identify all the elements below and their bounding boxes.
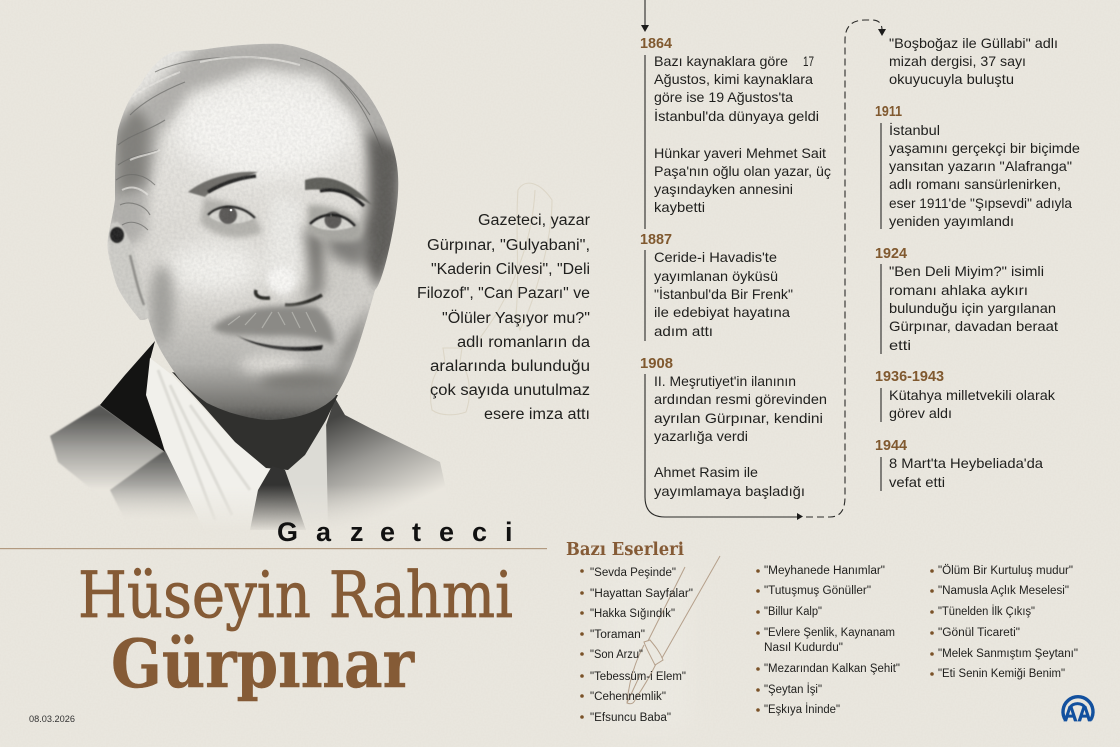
timeline column 1: [640, 36, 831, 499]
timeline column 2: [875, 35, 1080, 490]
works list column 3: "Ölüm Bir Kurtuluş mudur": [938, 565, 1073, 577]
entry 1908: Ahmet Rasim ile: [654, 464, 758, 480]
works list column 2: "Evlere Şenlik, Kaynanam: [764, 627, 895, 639]
nose: [266, 200, 304, 298]
works list column 3: [930, 565, 1078, 680]
intro paragraph: esere imza attı: [484, 406, 590, 423]
chin shading: [260, 373, 340, 391]
subtitle: Gazeteci: t: [412, 517, 421, 547]
entry 1887: [654, 249, 793, 339]
entry 1908: [654, 373, 827, 499]
year 1924: 1924: [875, 246, 907, 262]
intro paragraph: çok sayıda unutulmaz: [430, 382, 590, 399]
entry 1908: yazarlığa verdi: [654, 428, 748, 444]
hair: [102, 36, 405, 250]
intro paragraph: Gürpınar, "Gulyabani",: [427, 237, 590, 254]
title: last name: Gürpınar: [111, 625, 415, 703]
forehead highlight: [175, 82, 355, 178]
intro paragraph: Gazeteci, yazar: [478, 212, 590, 229]
works heading: Bazı Eserleri: [566, 540, 684, 560]
entry 1911: yaşamını gerçekçi bir biçimde: [889, 140, 1080, 156]
entry 1864: İstanbul'da dünyaya geldi: [654, 107, 819, 124]
subtitle: Gazeteci: e: [439, 517, 454, 547]
works list column 2: "Meyhanede Hanımlar": [764, 565, 885, 577]
works list column 3: "Namusla Açlık Meselesi": [938, 585, 1069, 597]
entry 1944: vefat etti: [889, 474, 945, 490]
entry magazine: "Boşboğaz ile Güllabi" adlı: [889, 35, 1058, 51]
entry 1924: "Ben Deli Miyim?" isimli: [889, 263, 1044, 279]
entry 1864: Ağustos, kimi kaynaklara: [654, 71, 813, 87]
entry 1944: 8 Mart'ta Heybeliada'da: [889, 455, 1043, 471]
works list column 2: Nasıl Kudurdu": [764, 642, 843, 654]
jacket and shirt: [50, 341, 455, 532]
entry 1864: göre ise 19 Ağustos'ta: [654, 89, 793, 105]
intro paragraph: aralarında bulunduğu: [430, 358, 590, 375]
subtitle: Gazeteci: z: [350, 517, 364, 547]
subtitle: Gazeteci: c: [472, 517, 487, 547]
subtitle: Gazeteci: G: [277, 517, 298, 547]
entry 1911: adlı romanı sansürlenirken,: [889, 176, 1061, 192]
subtitle: Gazeteci: i: [505, 517, 513, 547]
dark temple right: [358, 130, 402, 290]
intro paragraph: "Kaderin Cilvesi", "Deli: [431, 261, 590, 278]
portrait photo: [50, 36, 455, 532]
intro paragraph: Filozof", "Can Pazarı" ve: [417, 285, 590, 302]
faint inkwell and feather watermark: [431, 183, 552, 415]
entry 1864: Hünkar yaveri Mehmet Sait: [654, 145, 826, 161]
entry 1864: kaybetti: [654, 199, 705, 215]
works list column 1: "Tebessüm-i Elem": [590, 671, 686, 683]
works list column 2: "Mezarından Kalkan Şehit": [764, 663, 900, 675]
head: [100, 36, 410, 425]
entry 1944: [889, 455, 1043, 490]
entry 1911: yeniden yayımlandı: [889, 213, 1014, 229]
works list column 3: "Eti Senin Kemiği Benim": [938, 668, 1065, 680]
year 1944: 1944: [875, 438, 907, 454]
subtitle: Gazeteci: a: [316, 517, 332, 547]
entry 1887: adım attı: [654, 323, 713, 339]
entry 1864: yaşındayken annesini: [654, 181, 793, 197]
year 1887: 1887: [640, 232, 672, 248]
subtitle: Gazeteci: e: [380, 517, 395, 547]
entry 1911: [889, 121, 1080, 229]
works list column 2: [756, 565, 900, 716]
eyes: [200, 198, 362, 241]
entry 1908: II. Meşrutiyet'in ilanının: [654, 373, 796, 389]
works list column 1: "Son Arzu": [590, 649, 643, 661]
works list column 1: "Efsuncu Baba": [590, 712, 671, 724]
entry 1924: [889, 263, 1058, 353]
entry magazine: okuyucuyla buluştu: [889, 71, 1014, 87]
entry 1911: eser 1911'de "Şıpsevdi" adıyla: [889, 195, 1072, 211]
year 1936-1943: 1936-1943: [875, 369, 944, 385]
timeline connector lines and arrows: [641, 0, 886, 520]
entry 1887: yayımlanan öyküsü: [654, 268, 778, 284]
works list column 1: "Hakka Sığındık": [590, 608, 675, 620]
cheeks: [165, 242, 265, 294]
entry 1924: Gürpınar, davadan beraat: [889, 318, 1058, 334]
necktie: [250, 466, 306, 530]
works list column 3: "Melek Sanmıştım Şeytanı": [938, 648, 1078, 660]
intro paragraph: [417, 212, 590, 423]
entry 1924: etti: [889, 337, 911, 353]
entry 1864: Paşa'nın oğlu olan yazar, üç: [654, 163, 831, 179]
works list column 1: "Toraman": [590, 629, 645, 641]
entry 1911: yansıtan yazarın "Alafranga": [889, 158, 1072, 174]
works list column 2: "Tutuşmuş Gönüller": [764, 585, 871, 597]
entry 1864: Bazı kaynaklara göre: [654, 53, 788, 69]
entry 1887: ile edebiyat hayatına: [654, 304, 790, 320]
works list column 2: "Billur Kalp": [764, 606, 822, 618]
entry 1864: 17: [803, 53, 814, 69]
year 1864: 1864: [640, 36, 672, 52]
intro paragraph: adlı romanların da: [457, 334, 590, 351]
works list column 1: "Cehennemlik": [590, 691, 666, 703]
entry 1936-1943: Kütahya milletvekili olarak: [889, 387, 1056, 403]
moustache: [212, 306, 334, 345]
entry 1924: bulunduğu için yargılanan: [889, 300, 1056, 316]
works list column 3: "Gönül Ticareti": [938, 627, 1020, 639]
intro paragraph: "Ölüler Yaşıyor mu?": [442, 309, 590, 327]
entry 1908: ayrılan Gürpınar, kendini: [654, 410, 823, 426]
works list column 1: "Hayattan Sayfalar": [590, 588, 693, 600]
date: 08.03.2026: [29, 714, 75, 724]
entry 1908: ardından resmi görevinden: [654, 391, 827, 407]
works list column 2: "Eşkıya İninde": [764, 703, 840, 716]
works list column 2: "Şeytan İşi": [764, 683, 822, 696]
photo grain: [108, 51, 370, 368]
entry 1864: [654, 53, 831, 215]
entry 1936-1943: görev aldı: [889, 405, 952, 421]
eyebrows: [188, 172, 258, 197]
title: first line: Hüseyin Rahmi: [78, 559, 513, 633]
entry 1936-1943: [889, 387, 1056, 421]
year 1908: 1908: [640, 356, 673, 372]
ear: [108, 222, 150, 320]
AA logo: AA: [1064, 703, 1092, 726]
works list column 1: "Sevda Peşinde": [590, 567, 676, 579]
year 1911: 1911: [875, 104, 902, 120]
entry 1911: İstanbul: [889, 121, 940, 138]
entry magazine: mizah dergisi, 37 sayı: [889, 53, 1026, 69]
entry 1908: yayımlamaya başladığı: [654, 483, 805, 499]
entry 1887: "İstanbul'da Bir Frenk": [654, 285, 793, 302]
divider line: [0, 548, 547, 549]
works list column 1: [580, 567, 693, 724]
entry 1924: romanı ahlaka aykırı: [889, 282, 1028, 298]
pen illustration: [627, 556, 720, 704]
entry magazine: [889, 35, 1058, 87]
mouth: [236, 335, 323, 351]
entry 1887: Ceride-i Havadis'te: [654, 249, 777, 265]
works list column 3: "Tünelden İlk Çıkış": [938, 605, 1035, 618]
